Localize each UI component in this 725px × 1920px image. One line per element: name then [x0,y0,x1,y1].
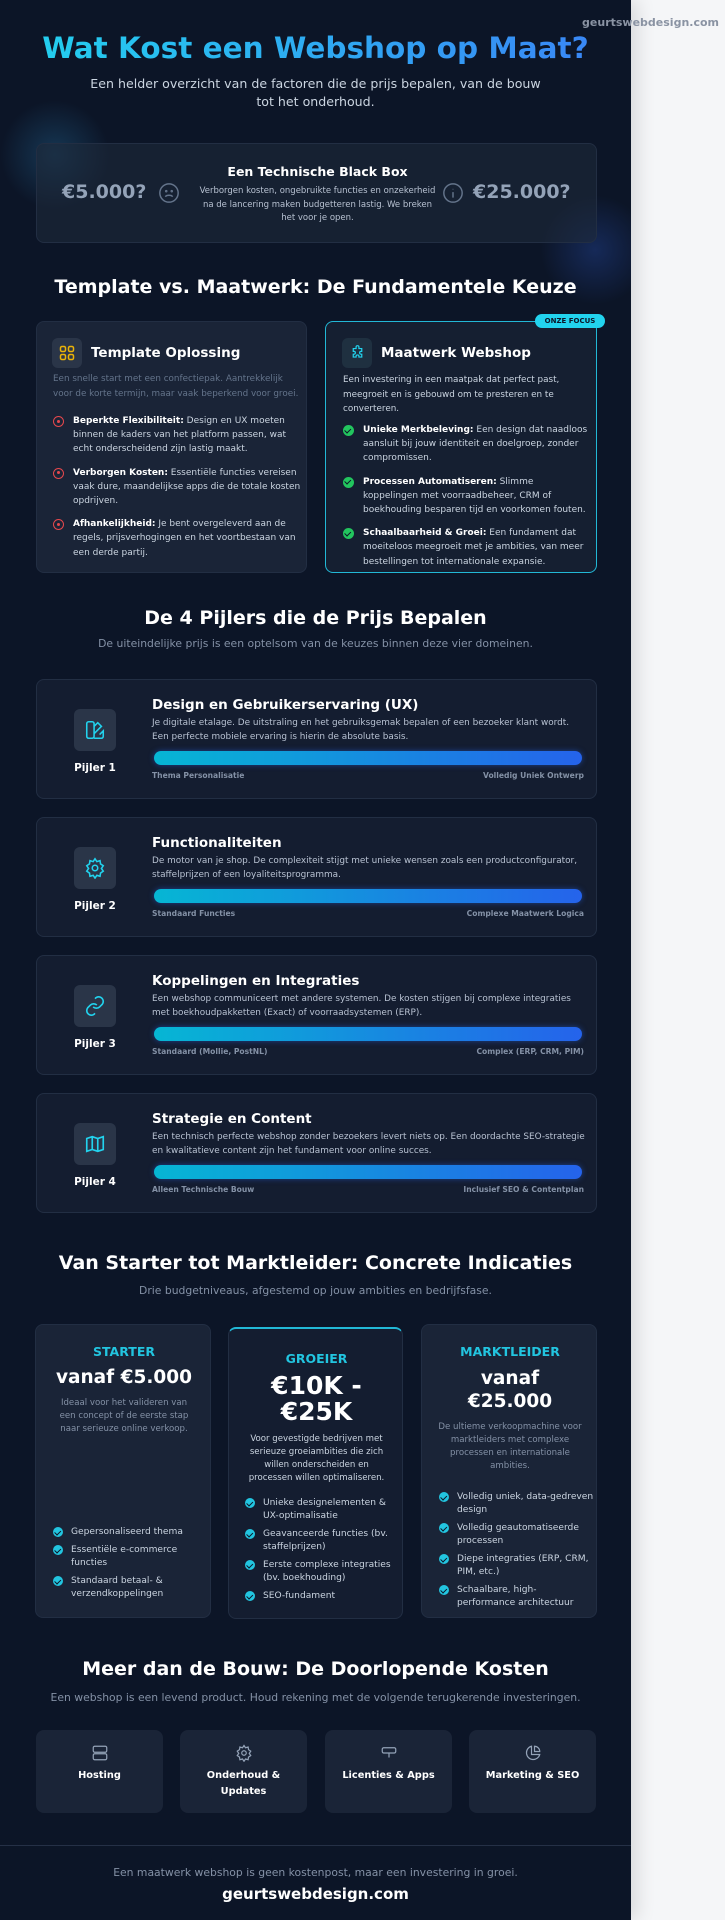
pillar 3 text: Standaard (Mollie, PostNL) [152,1047,267,1056]
icon: info [443,183,463,203]
price card: starter [35,1324,211,1618]
price card: groeier: €25K [281,1397,352,1426]
pillar 1 text: Volledig Uniek Ontwerp [483,771,584,780]
price card: groeier: €10K - [271,1371,362,1400]
cost: onderhoud: Updates [221,1786,266,1797]
subtitle: Een helder overzicht van de factoren die de prijs bepalen, van de bouw tot het onderhoud. [90,76,541,109]
icon: gear [74,847,116,889]
icon: grid [52,338,82,368]
icon: design [74,709,116,751]
cost: onderhoud: Onderhoud & [207,1770,280,1781]
price card: starter: vanaf €5.000 [56,1367,192,1388]
cost: onderhoud [180,1730,307,1813]
price card: marktleider: MARKTLEIDER [460,1344,560,1359]
price card: marktleider: vanaf [481,1368,539,1389]
text: Verborgen kosten, ongebruikte functies en onzekerheid na de lancering maken budgetteren lastig. We breken het voor je open. [200,186,435,223]
pillar 4 text: Alleen Technische Bouw [152,1185,254,1194]
cost: marketing: Marketing & SEO [486,1770,579,1781]
subheading: Een webshop is een levend product. Houd rekening met de volgende terugkerende investeringen. [50,1691,580,1704]
subheading: De uiteindelijke prijs is een optelsom van de keuzes binnen deze vier domeinen. [98,637,533,650]
bullets: cons [53,416,300,558]
price card: marktleider [421,1324,597,1618]
price card: marktleider: Diepe integraties (ERP, CRM, PIM, etc.) [457,1554,589,1577]
heading: Een Technische Black Box [227,164,408,179]
pillar 1: Pijler 1 [74,762,116,774]
pillar 3 [36,955,597,1075]
heading: pijlers: De 4 Pijlers die de Prijs Bepalen [144,607,487,629]
price card: groeier: GROEIER [286,1351,347,1366]
price card: groeier: Geavanceerde functies (bv. staffelprijzen) [263,1529,388,1552]
icon: puzzle [342,338,372,368]
price card: marktleider: Schaalbare, high-performance architectuur [457,1585,574,1608]
pillar 4 text: Strategie en Content [152,1111,312,1127]
pillar 4 text [151,1111,585,1194]
heading: indicaties: Van Starter tot Marktleider: Concrete Indicaties [59,1252,572,1274]
price card: marktleider: €25.000 [468,1391,552,1412]
price card: starter: Ideaal voor het valideren van een concept of de eerste stap naar serieuze online verkoop. [60,1398,188,1434]
pillar 1 [36,679,597,799]
title: Maatwerk Webshop [381,345,531,361]
desc: Een investering in een maatpak dat perfect past, meegroeit en is gebouwd om te presteren en te converteren. [343,375,559,414]
bullets: cons: Verborgen Kosten: Essentiële functies vereisen vaak dure, maandelijkse apps die de totale kosten opdrijven. [73,468,300,506]
bullets: pros [343,425,587,567]
subheading: Drie budgetniveaus, afgestemd op jouw ambities en bedrijfsfase. [139,1284,492,1297]
price high: €25.000? [473,181,571,203]
panel: template [36,321,307,573]
price card: groeier [228,1327,403,1619]
cost: hosting [36,1730,163,1813]
price card: starter: Gepersonaliseerd thema [71,1527,183,1537]
pillar 1 text: Je digitale etalage. De uitstraling en het gebruiksgemak bepalen of een bezoeker klant wordt. Een perfecte mobiele ervaring is hierin de absolute basis. [152,718,569,742]
pillar 3: Pijler 3 [74,1038,116,1050]
pillar 4 text: Een technisch perfecte webshop zonder bezoekers levert niets op. Een doordachte SEO-strategie en kwalitatieve content zijn het fundament voor online succes. [152,1132,585,1156]
price card: groeier: SEO-fundament [263,1591,335,1601]
pillar 2 text [151,835,585,918]
panel: maatwerk [325,321,597,573]
footer [0,1845,631,1920]
cost: licenties [325,1730,452,1813]
cost: hosting: Hosting [78,1770,121,1781]
pillar 3 text [151,973,585,1056]
heading: doorlopende kosten: Meer dan de Bouw: De Doorlopende Kosten [82,1658,549,1680]
pillar 1 text [151,697,585,780]
footer: Een maatwerk webshop is geen kostenpost, maar een investering in groei. [113,1866,518,1879]
price card: marktleider: Volledig geautomatiseerde processen [457,1523,579,1546]
icon: sad face [159,183,179,203]
desc: Een snelle start met een confectiepak. Aantrekkelijk voor de korte termijn, maar vaak beperkend voor groei. [53,374,298,398]
price card: starter: Essentiële e-commerce functies [71,1545,177,1568]
pillar 3 text: Complex (ERP, CRM, PIM) [476,1047,584,1056]
pillar 2: Pijler 2 [74,900,116,912]
price card: groeier: Eerste complexe integraties (bv. boekhouding) [263,1560,391,1583]
bullets: cons: Afhankelijkheid: Je bent overgeleverd aan de regels, prijsverhogingen en het voortbestaan van een derde partij. [73,519,296,558]
watermark: geurtswebdesign.com [582,16,719,29]
pillar 3 text: Koppelingen en Integraties [152,973,359,989]
pillar 3 text: Een webshop communiceert met andere systemen. De kosten stijgen bij complexe integraties met boekhoudpakketten (Exact) of voorraadsystemen (ERP). [152,994,571,1018]
pillar 4: Pijler 4 [74,1176,116,1188]
pillar 2 text: Standaard Functies [152,909,235,918]
price low: €5.000? [62,181,146,203]
pillar 2 [36,817,597,937]
cost: licenties: Licenties & Apps [342,1770,435,1781]
bullets: pros: Processen Automatiseren: Slimme koppelingen met voorraadbeheer, CRM of boekhouding besparen tijd en voorkomen fouten. [363,477,586,515]
title: Wat Kost een Webshop op Maat? [42,31,589,65]
icon: map [74,1123,116,1165]
badge: onze focus: ONZE FOCUS [545,317,595,325]
pillar 1 text: Design en Gebruikerservaring (UX) [152,697,418,713]
panel: black box [36,143,597,243]
price card: marktleider: Volledig uniek, data-gedreven design [457,1492,593,1515]
bullets: pros: Schaalbaarheid & Groei: Een fundament dat moeiteloos meegroeit met je ambities, van meer bestellingen tot internationale expansie. [363,528,583,567]
glow decorations [0,100,110,210]
bullets: cons: Beperkte Flexibiliteit: Design en UX moeten binnen de kaders van het platform passen, wat echt onderscheidend zijn lastig maakt. [73,416,286,454]
price card: starter: STARTER [93,1344,155,1359]
price card: groeier: Unieke designelementen & UX-optimalisatie [263,1498,386,1521]
pillar 4 text: Inclusief SEO & Contentplan [463,1185,584,1194]
price card: marktleider: De ultieme verkoopmachine voor marktleiders met complexe processen en internationale ambities. [438,1422,582,1471]
title: Template Oplossing [91,345,240,361]
cost: marketing [469,1730,596,1813]
icon: link [74,985,116,1027]
heading: template vs maatwerk: Template vs. Maatwerk: De Fundamentele Keuze [54,276,577,298]
pillar 2 text: De motor van je shop. De complexiteit stijgt met unieke wensen zoals een productconfigurator, staffelprijzen of een loyaliteitsprogramma. [152,856,577,880]
pillar 1 text: Thema Personalisatie [152,771,244,780]
badge: onze focus [535,314,605,328]
price card: groeier: Voor gevestigde bedrijven met serieuze groeiambities die zich willen onderscheiden en processen willen optimaliseren. [249,1434,384,1483]
bullets: pros: Unieke Merkbeleving: Een design dat naadloos aansluit bij jouw identiteit en doelgroep, zonder compromissen. [363,425,587,463]
pillar 2 text: Functionaliteiten [152,835,282,851]
pillar 4 [36,1093,597,1213]
price card: starter: Standaard betaal- & verzendkoppelingen [71,1576,163,1599]
pillar 2 text: Complexe Maatwerk Logica [467,909,584,918]
footer: geurtswebdesign.com [222,1885,409,1903]
